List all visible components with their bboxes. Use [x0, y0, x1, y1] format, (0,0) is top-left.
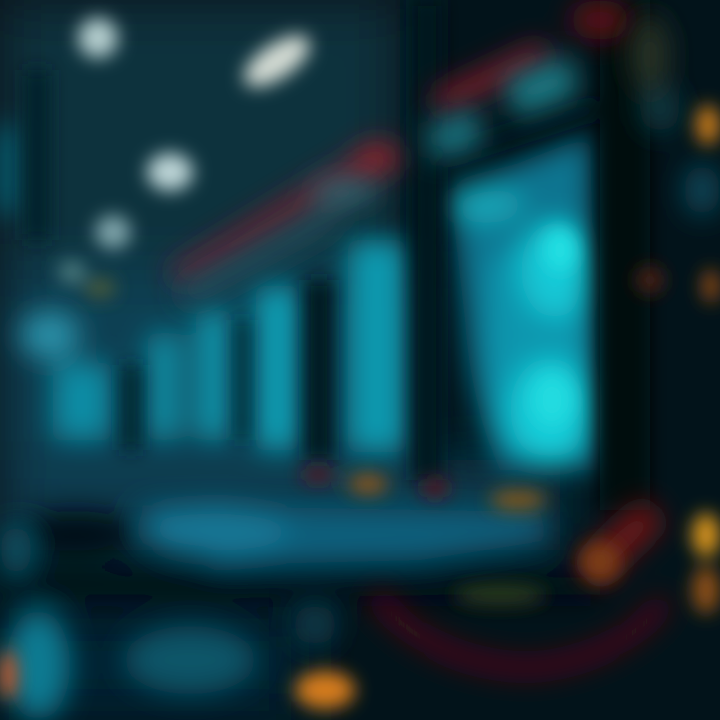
ceiling and wall haze	[0, 0, 560, 720]
server columns	[0, 125, 406, 452]
upper teal panels	[175, 15, 720, 305]
ceiling lights	[58, 18, 318, 298]
right server panel	[447, 135, 598, 470]
dark pillars	[25, 0, 650, 510]
bright panel highlights	[532, 228, 576, 426]
floor platform	[0, 504, 600, 720]
red beams	[165, 0, 630, 285]
red arc on floor	[375, 512, 665, 668]
